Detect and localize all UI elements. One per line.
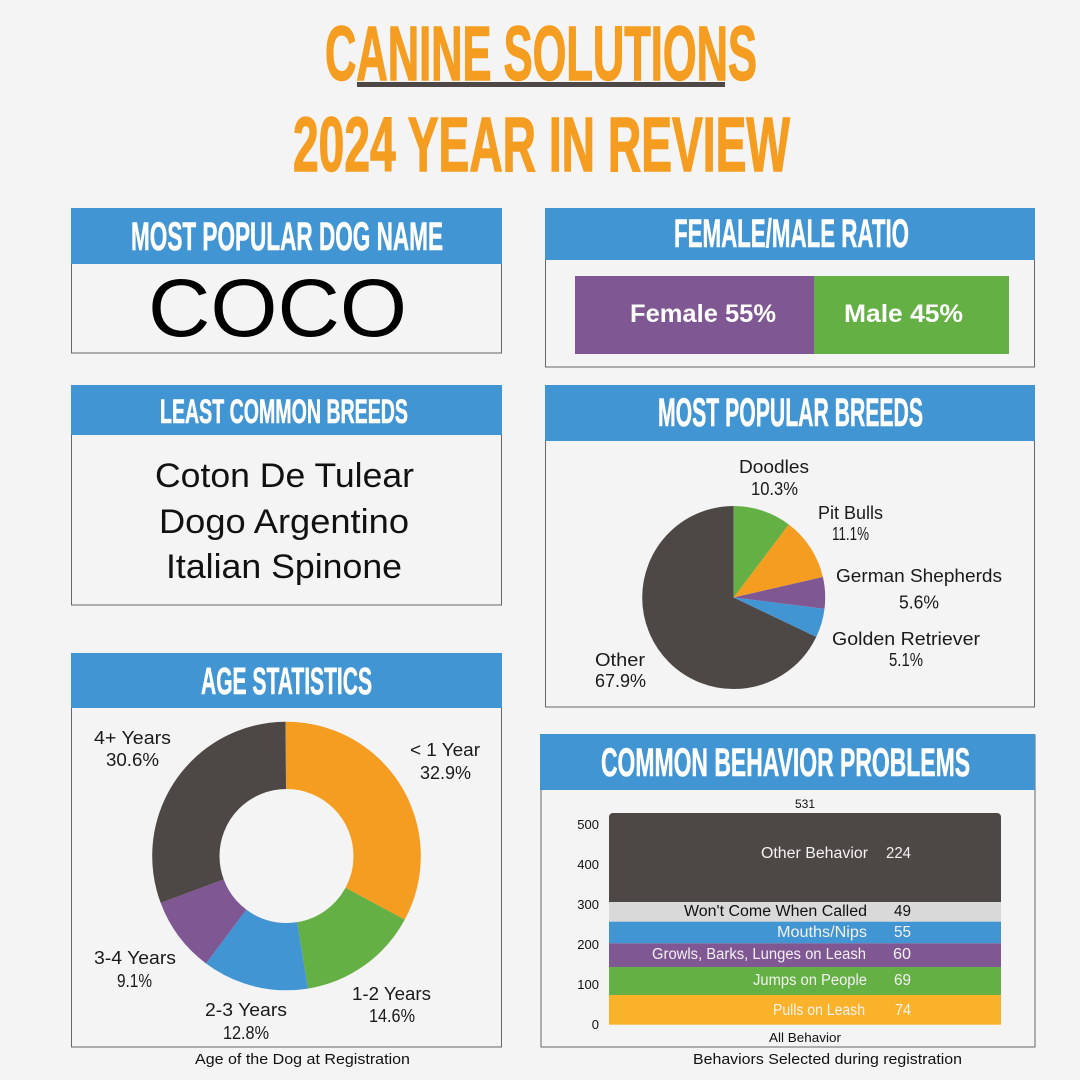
donut labels: 32.9% (420, 763, 471, 783)
heading: most popular dog name (71, 208, 502, 264)
pie chart (688, 552, 779, 643)
pie labels: Doodles (739, 457, 809, 477)
y axis: 400 (577, 857, 599, 872)
bar labels: Pulls on Leash (773, 1002, 865, 1019)
heading: most popular dog name: MOST POPULAR DOG NAME (131, 215, 443, 259)
pie labels: German Shepherds (836, 566, 1002, 586)
donut labels: 30.6% (106, 750, 159, 770)
donut labels: 4+ Years (94, 728, 171, 748)
donut chart (186, 755, 387, 957)
title (293, 11, 790, 188)
bar labels: Growls, Barks, Lunges on Leash (652, 946, 866, 963)
breed list: Italian Spinone (166, 548, 402, 586)
donut labels: 14.6% (369, 1006, 415, 1026)
heading: age statistics: AGE STATISTICS (201, 661, 372, 703)
bar labels: 74 (895, 1002, 911, 1019)
heading: least common breeds: LEAST COMMON BREEDS (160, 393, 408, 431)
breed list: Coton De Tulear (155, 457, 414, 495)
bar labels: Other Behavior (761, 845, 868, 862)
bar labels (652, 845, 911, 1019)
bar labels: Mouths/Nips (777, 924, 867, 941)
pie labels (595, 457, 1002, 691)
stacked bar chart: 531 (795, 797, 815, 811)
pie labels: 5.1% (889, 650, 923, 670)
donut labels: 2-3 Years (205, 1000, 287, 1020)
panel: most popular breeds (545, 385, 1035, 707)
y axis: 0 (592, 1017, 599, 1032)
caption: age: Age of the Dog at Registration (195, 1051, 410, 1068)
pie labels: Pit Bulls (818, 503, 883, 523)
bar labels: 60 (893, 946, 911, 963)
ratio bar (575, 276, 1009, 354)
bar labels: 49 (894, 903, 911, 920)
ratio bar: Female 55% (630, 300, 776, 328)
bar labels: 224 (886, 845, 911, 862)
y axis: 100 (577, 977, 599, 992)
heading: least common breeds (71, 385, 502, 435)
donut labels: < 1 Year (410, 740, 480, 760)
panel: least common breeds (71, 385, 502, 605)
pie labels: 10.3% (751, 479, 798, 499)
pie labels: Other (595, 650, 645, 670)
breed list (155, 457, 414, 586)
title: CANINE SOLUTIONS (325, 11, 757, 97)
stacked bar chart: All Behavior (769, 1030, 842, 1045)
pie labels: Golden Retriever (832, 629, 980, 649)
breed list: Dogo Argentino (159, 503, 409, 541)
donut labels (94, 728, 480, 1043)
y axis: 300 (577, 897, 599, 912)
heading: age statistics (71, 653, 502, 708)
pie labels: 11.1% (832, 524, 869, 544)
dog name: COCO (148, 263, 407, 354)
panel: common behavior problems (540, 734, 1035, 1047)
panel: age statistics (71, 653, 502, 1047)
bar labels: 69 (894, 972, 911, 989)
bar labels: Jumps on People (753, 972, 867, 989)
caption: behaviors: Behaviors Selected during registration (693, 1051, 962, 1068)
bar labels: 55 (894, 924, 911, 941)
pie labels: 67.9% (595, 671, 646, 691)
donut labels: 1-2 Years (352, 984, 431, 1004)
stacked bar chart (577, 797, 1001, 1045)
pie labels: 5.6% (899, 592, 939, 612)
panel: female/male ratio (545, 208, 1035, 367)
bar labels: Won't Come When Called (684, 903, 867, 920)
y axis: 200 (577, 937, 599, 952)
heading: female/male ratio (545, 208, 1035, 260)
heading: common behavior problems (540, 734, 1035, 790)
heading: most popular breeds (545, 385, 1035, 441)
ratio bar: Male 45% (844, 300, 963, 328)
donut labels: 9.1% (117, 971, 152, 991)
y axis (577, 817, 599, 1032)
donut labels: 12.8% (223, 1023, 269, 1043)
panel: most popular dog name (71, 208, 502, 354)
y axis: 500 (577, 817, 599, 832)
donut labels: 3-4 Years (94, 948, 176, 968)
